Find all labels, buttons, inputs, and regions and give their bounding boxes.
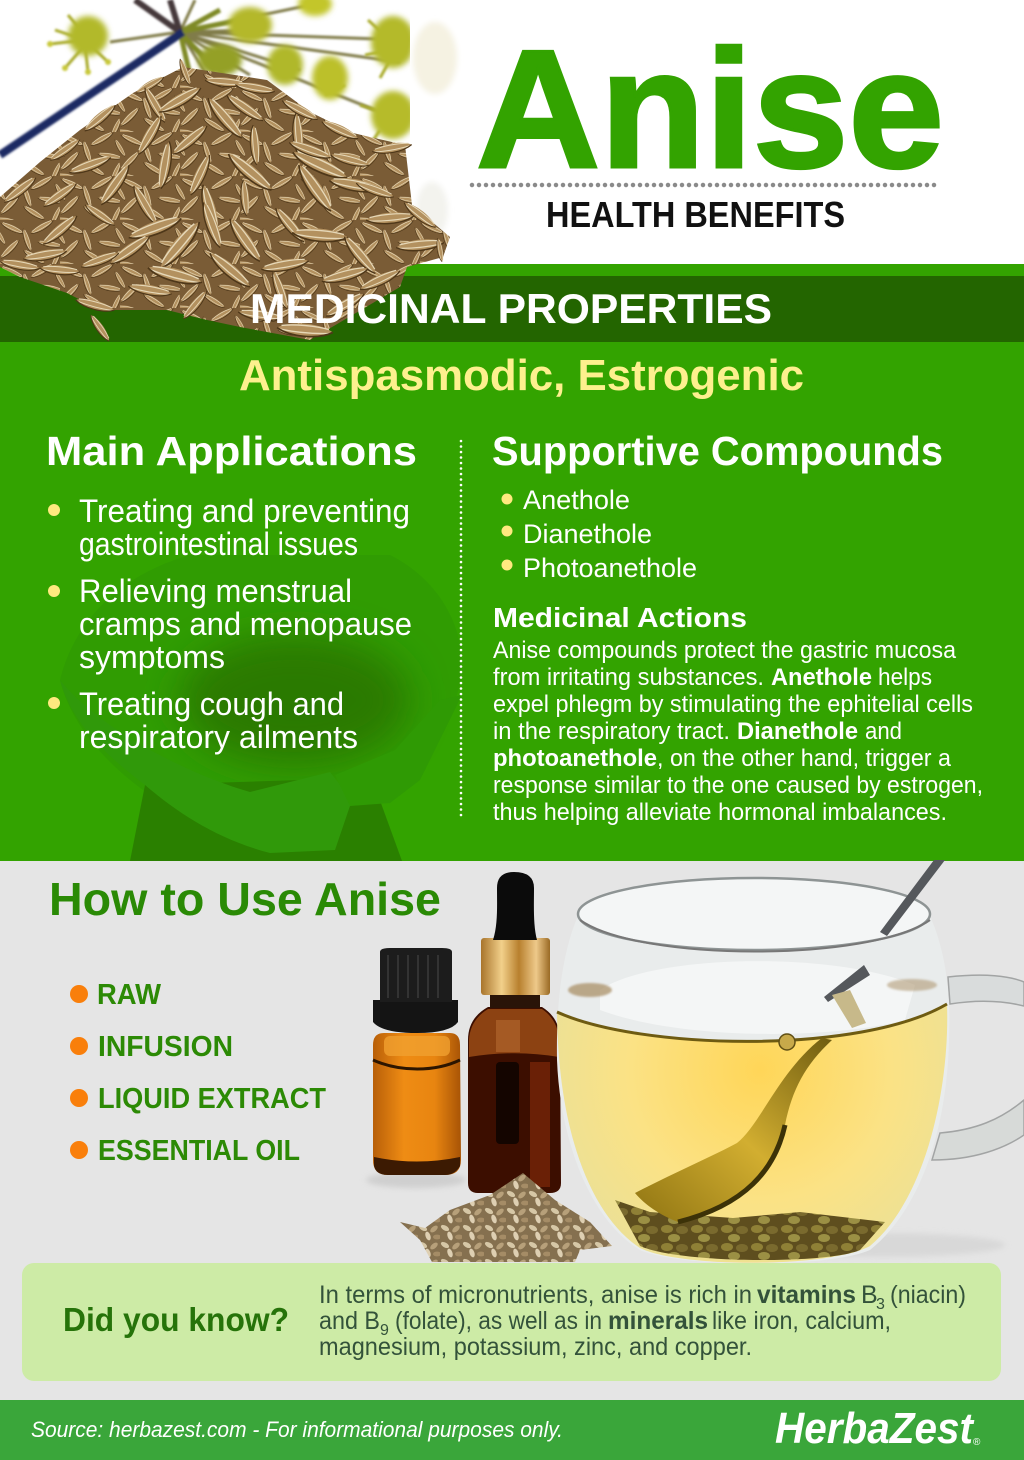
cup handle — [932, 975, 1024, 1160]
dotted column divider — [460, 441, 462, 820]
logo: HerbaZest: HerbaZest — [775, 1404, 975, 1453]
logo: HerbaZest: ® — [973, 1437, 981, 1448]
image: faded flower — [413, 22, 457, 238]
text: micronutrients: like iron, calcium, — [712, 1307, 891, 1335]
heading: how to use anise: How to Use Anise — [49, 873, 441, 925]
compound list: Photoanethole — [523, 553, 697, 583]
panel: did you know — [22, 1263, 1001, 1381]
text: medicinal actions paragraph: , on the other hand, trigger a — [657, 745, 952, 772]
image: amber essential oil bottle — [366, 948, 466, 1188]
header background — [0, 0, 1024, 264]
list: uses: LIQUID EXTRACT — [98, 1083, 326, 1115]
text: micronutrients: In terms of micronutrients, anise is rich in — [319, 1281, 752, 1309]
tea — [555, 1000, 952, 1270]
list: uses — [70, 979, 326, 1167]
bullet: menstrual: Relieving menstrual — [79, 573, 352, 609]
bullet: menstrual: symptoms — [79, 639, 225, 675]
compound list — [502, 485, 697, 583]
list: uses: INFUSION — [98, 1031, 233, 1063]
text: medicinal actions paragraph: Anise compounds protect the gastric mucosa — [493, 637, 957, 664]
text: micronutrients — [319, 1281, 966, 1361]
text: medicinal actions paragraph — [493, 637, 983, 826]
bullet: menstrual: cramps and menopause — [79, 606, 412, 642]
spoon in tea — [635, 1038, 832, 1222]
image: caraway seed pile — [0, 58, 450, 343]
text: properties: Antispasmodic, Estrogenic — [239, 351, 804, 400]
text: medicinal actions paragraph: expel phlegm by stimulating the ephitelial cells — [493, 691, 973, 718]
panel: supportive compounds — [492, 428, 983, 826]
large foreground seeds — [22, 83, 414, 310]
footer bar — [0, 1400, 1024, 1460]
text: micronutrients: 9 — [380, 1322, 389, 1339]
text: medicinal actions paragraph: helps — [878, 664, 932, 691]
text: micronutrients: and B — [319, 1307, 380, 1335]
compound list: Anethole — [523, 485, 630, 515]
text: medicinal actions paragraph: from irritating substances. — [493, 664, 764, 691]
dotted divider — [472, 183, 940, 187]
bubble — [779, 1034, 795, 1050]
text: medicinal actions paragraph: and — [865, 718, 902, 745]
spoon handle — [880, 860, 945, 936]
text: micronutrients: (niacin) — [890, 1281, 966, 1309]
seeds along the outer pile edge — [0, 58, 445, 343]
image: woman holding abdomen silhouette — [60, 598, 461, 861]
text: micronutrients: B — [861, 1281, 878, 1309]
image: glass tea cup — [555, 860, 1024, 1270]
text: medicinal actions paragraph: thus helping alleviate hormonal imbalances. — [493, 799, 947, 826]
subtitle: HEALTH BENEFITS — [546, 194, 845, 235]
panel: main applications — [46, 428, 417, 755]
bullet: menstrual — [48, 573, 412, 675]
heading: supportive compounds: Supportive Compounds — [492, 428, 943, 474]
bullet: gastrointestinal — [48, 493, 410, 562]
text: medicinal actions paragraph: Dianethole — [737, 718, 858, 745]
bullet: cough — [48, 686, 358, 755]
bullet: cough: respiratory ailments — [79, 719, 358, 755]
subheading: medicinal actions: Medicinal Actions — [493, 602, 747, 633]
list: uses: ESSENTIAL OIL — [98, 1135, 300, 1167]
heading: did you know: Did you know? — [63, 1301, 289, 1338]
title: Anise — [476, 15, 944, 203]
text: medicinal actions paragraph: Anethole — [771, 664, 872, 691]
list: uses: RAW — [97, 979, 162, 1011]
cup body — [557, 916, 949, 1264]
bullet: gastrointestinal: gastrointestinal issues — [79, 526, 358, 562]
frost reflection — [600, 961, 915, 1034]
text: medicinal actions paragraph: response similar to the one caused by estrogen, — [493, 772, 983, 799]
text: micronutrients: vitamins — [757, 1281, 856, 1309]
image: anise umbel flowers — [0, 0, 415, 155]
text: micronutrients: minerals — [608, 1307, 708, 1335]
compound list: Dianethole — [523, 519, 652, 549]
bullet: gastrointestinal: Treating and preventing — [79, 493, 410, 529]
rim — [578, 878, 930, 950]
image: anise seed small pile — [400, 1173, 612, 1262]
text: micronutrients: 3 — [876, 1296, 885, 1313]
dark band: medicinal properties — [0, 276, 1024, 342]
green medicinal section background — [0, 264, 1024, 861]
heading: medicinal properties: MEDICINAL PROPERTIES — [250, 285, 772, 332]
text: medicinal actions paragraph: photoanethole — [493, 745, 657, 772]
heading: main applications: Main Applications — [46, 428, 417, 474]
bullet: cough: Treating cough and — [79, 686, 344, 722]
text: micronutrients: (folate), as well as in — [395, 1307, 602, 1335]
source note: Source: herbazest.com - For informational purposes only. — [31, 1417, 563, 1442]
image: dropper bottle — [468, 872, 561, 1193]
text: medicinal actions paragraph: in the respiratory tract. — [493, 718, 730, 745]
panel: how to use background — [0, 861, 1024, 1400]
soaked seeds — [615, 1200, 885, 1260]
text: micronutrients: magnesium, potassium, zinc, and copper. — [319, 1333, 752, 1361]
